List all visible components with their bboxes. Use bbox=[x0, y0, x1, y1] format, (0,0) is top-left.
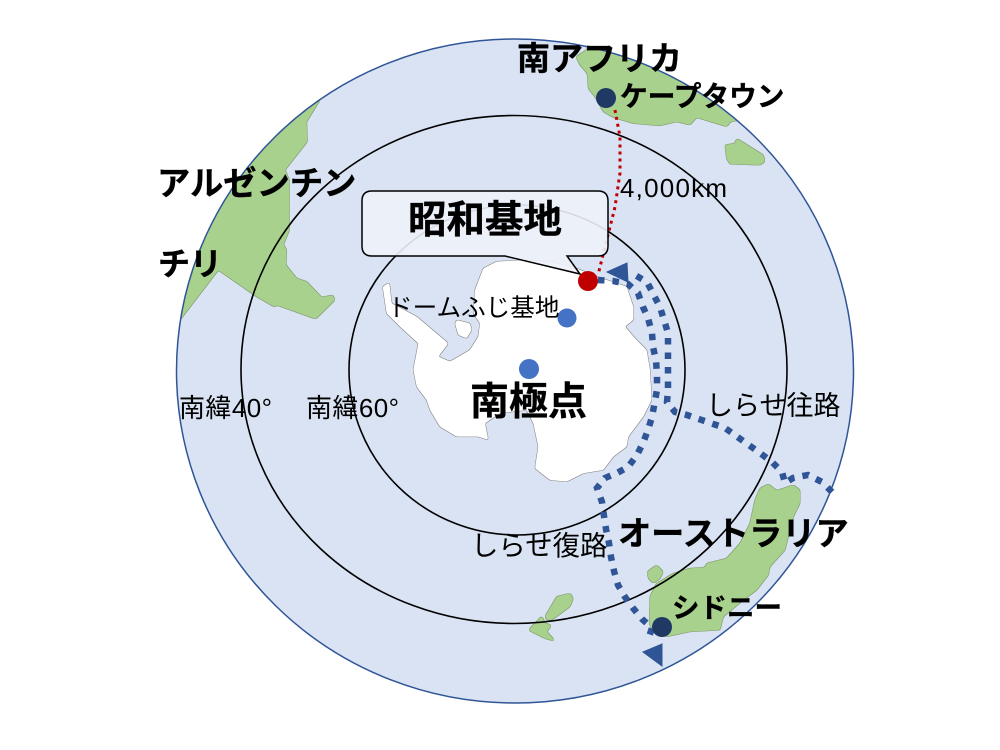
map infographic bbox=[160, 38, 854, 704]
latitude circle: 60 degrees south bbox=[349, 205, 685, 535]
land: South Africa bbox=[576, 47, 737, 127]
callout: Showa Station bbox=[362, 191, 608, 274]
label: Australia: オーストラリア bbox=[618, 516, 849, 553]
label: Argentina: アルゼンチン bbox=[157, 166, 356, 203]
outer circle outline bbox=[176, 39, 854, 703]
route: Shirase outbound bbox=[607, 263, 832, 492]
route: distance line Cape Town to Showa bbox=[598, 110, 620, 275]
arrowhead: return bbox=[643, 644, 662, 666]
marker: Sydney bbox=[652, 617, 672, 637]
marker: South Pole bbox=[519, 359, 539, 379]
label: South Pole: 南極点 bbox=[470, 381, 587, 424]
callout: Showa Station: 昭和基地 bbox=[408, 199, 562, 242]
latitude circle: 40 degrees south bbox=[241, 116, 787, 624]
label: Cape Town: ケープタウン bbox=[620, 81, 784, 112]
label: distance: 4,000km bbox=[620, 173, 727, 203]
label: Shirase outbound: しらせ往路 bbox=[706, 391, 840, 421]
land: ice shelf island bbox=[455, 320, 472, 338]
land: Tasmania bbox=[647, 565, 663, 583]
land: New Zealand bbox=[528, 593, 573, 642]
marker: Cape Town bbox=[596, 88, 616, 108]
land: Antarctica bbox=[383, 260, 652, 482]
arrowhead: outbound bbox=[607, 263, 628, 282]
label: Sydney: シドニー bbox=[672, 592, 782, 623]
land: Madagascar bbox=[725, 138, 765, 165]
label: Shirase return: しらせ復路 bbox=[471, 530, 607, 561]
label: latitude 60: 南緯60° bbox=[306, 393, 399, 423]
marker: Showa Station bbox=[578, 271, 598, 291]
marker: Dome Fuji bbox=[558, 308, 576, 328]
land: Australia bbox=[649, 484, 800, 637]
label: Chile: チリ bbox=[158, 246, 222, 282]
route: Shirase return bbox=[597, 280, 662, 666]
label: Dome Fuji: ドームふじ基地 bbox=[388, 294, 559, 322]
land: South America bbox=[181, 100, 335, 320]
ocean disc: latitude 30 limit bbox=[176, 39, 854, 703]
label: South Africa: 南アフリカ bbox=[517, 40, 682, 77]
label: latitude 40: 南緯40° bbox=[179, 393, 272, 423]
